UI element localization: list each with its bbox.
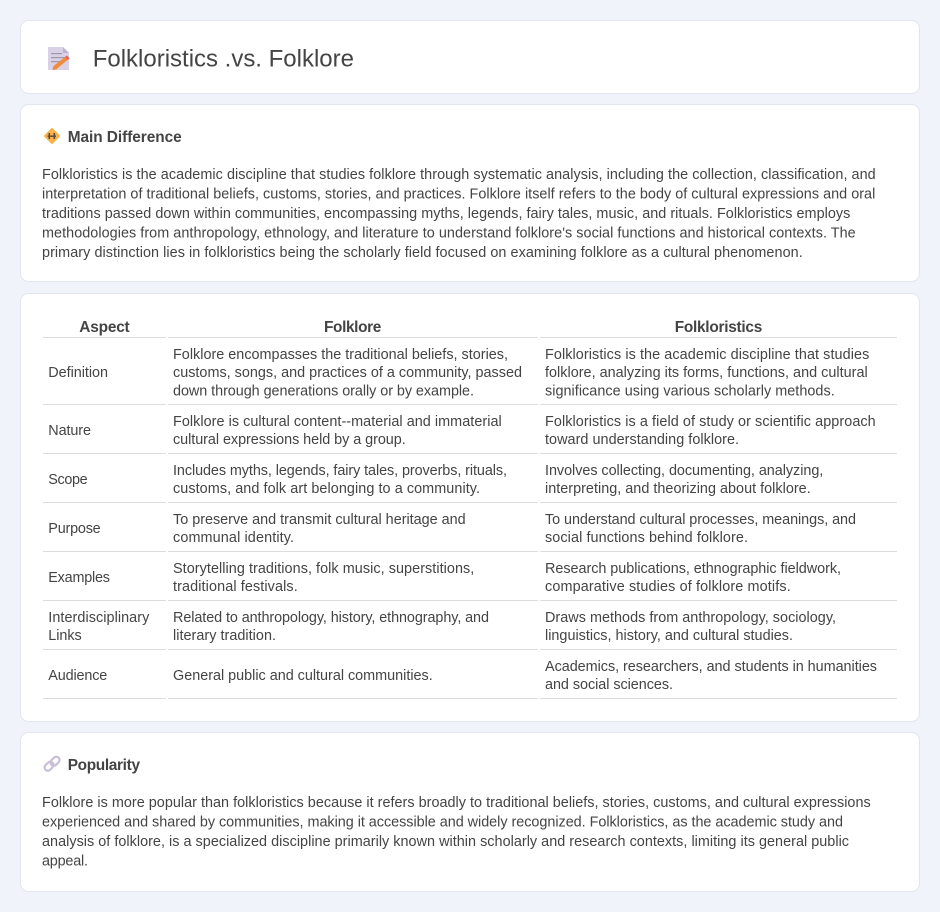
table header row: Folkloristics <box>675 319 762 336</box>
row: examples: comparative studies of folklore motifs. <box>545 579 791 595</box>
text block: popularity paragraph: experienced and shared by communities, making it accessible and widely recognized. Folkloristics, as the academic study and <box>42 814 843 830</box>
row: interdisciplinary links: Draws methods from anthropology, sociology, <box>545 610 836 626</box>
text block: main difference paragraph <box>42 167 876 261</box>
row: audience: Audience <box>48 668 107 684</box>
table header row: Aspect <box>79 319 130 336</box>
row: purpose: social functions behind folklore. <box>545 530 748 546</box>
icon: chain link <box>43 755 61 772</box>
row: scope: interpreting, and theorizing about folklore. <box>545 481 811 497</box>
text block: main difference paragraph: traditions passed down within communities, encompassing myths, legends, fairy tales, music, and rituals. Folkloristics employs <box>42 206 850 222</box>
row: audience: General public and cultural communities. <box>173 668 433 684</box>
row: definition: Definition <box>48 365 108 381</box>
row: examples: Storytelling traditions, folk music, superstitions, <box>173 561 474 577</box>
row: purpose: communal identity. <box>173 530 294 546</box>
row: definition: down through generations orally or by example. <box>173 384 474 400</box>
row: nature: toward understanding folklore. <box>545 432 739 448</box>
row: nature: Nature <box>48 423 91 439</box>
row: audience <box>48 659 877 693</box>
row: scope: Includes myths, legends, fairy tales, proverbs, rituals, <box>173 463 507 479</box>
row: interdisciplinary links: Interdisciplinary <box>48 610 150 626</box>
row: definition: Folkloristics is the academic discipline that studies <box>545 347 869 363</box>
row: examples: traditional festivals. <box>173 579 298 595</box>
icon: warning diamond <box>44 128 60 144</box>
row: purpose: To understand cultural processes, meanings, and <box>545 512 856 528</box>
row: nature <box>48 414 876 448</box>
panel: comparison table <box>20 294 920 722</box>
title: Folkloristics .vs. Folklore <box>93 46 354 73</box>
text block: popularity paragraph <box>42 795 871 870</box>
table header row <box>79 319 762 336</box>
row: examples <box>48 561 841 595</box>
table header row: Folklore <box>324 319 382 336</box>
row: purpose <box>48 512 856 546</box>
text block: popularity paragraph: analysis of folklore, is a specialized discipline primarily known within scholarly and research contexts, limiting its general public <box>42 834 849 850</box>
panel: popularity <box>20 732 920 892</box>
row: audience: and social sciences. <box>545 677 673 693</box>
panel: main difference <box>20 104 920 282</box>
row: examples: Examples <box>48 570 110 586</box>
row: definition: customs, songs, and practices of a community, passed <box>173 365 522 381</box>
row: interdisciplinary links: Related to anthropology, history, ethnography, and <box>173 610 489 626</box>
heading: main difference: Main Difference <box>68 129 182 146</box>
panel: header <box>20 20 920 94</box>
row: definition <box>48 347 869 400</box>
icon: document with pencil <box>48 47 70 70</box>
text block: main difference paragraph: interpretation of traditional beliefs, customs, stories, and practices. Folklore itself refers to the body of cultural expressions and oral <box>42 186 875 202</box>
row: nature: Folkloristics is a field of study or scientific approach <box>545 414 876 430</box>
row: scope: customs, and folk art belonging to a community. <box>173 481 480 497</box>
text block: main difference paragraph: primary distinction lies in folkloristics being the scholarly field focused on examining folklore as a cultural phenomenon. <box>42 245 803 261</box>
text block: popularity paragraph: appeal. <box>42 854 88 870</box>
row: audience: Academics, researchers, and students in humanities <box>545 659 877 675</box>
heading: popularity: Popularity <box>68 757 140 774</box>
row: definition: significance using various scholarly methods. <box>545 384 835 400</box>
row: definition: folklore, analyzing its forms, functions, and cultural <box>545 365 868 381</box>
row: scope <box>48 463 823 497</box>
row: interdisciplinary links: literary tradition. <box>173 628 276 644</box>
row: definition: Folklore encompasses the traditional beliefs, stories, <box>173 347 508 363</box>
row: interdisciplinary links: Links <box>48 628 82 644</box>
row: nature: Folklore is cultural content--material and immaterial <box>173 414 502 430</box>
text block: main difference paragraph: methodologies from anthropology, ethnology, and literature to understand folklore's social functions and historical contexts. The <box>42 226 856 242</box>
text block: popularity paragraph: Folklore is more popular than folkloristics because it refers broadly to traditional beliefs, stories, customs, and cultural expressions <box>42 795 871 811</box>
row: purpose: To preserve and transmit cultural heritage and <box>173 512 466 528</box>
row: interdisciplinary links <box>48 610 836 644</box>
text block: main difference paragraph: Folkloristics is the academic discipline that studies folklore through systematic analysis, including the collection, classification, and <box>42 167 876 183</box>
row: scope: Scope <box>48 472 88 488</box>
row: nature: cultural expressions held by a group. <box>173 432 406 448</box>
row: purpose: Purpose <box>48 521 101 537</box>
row: interdisciplinary links: linguistics, history, and cultural studies. <box>545 628 793 644</box>
row: scope: Involves collecting, documenting, analyzing, <box>545 463 823 479</box>
row: examples: Research publications, ethnographic fieldwork, <box>545 561 841 577</box>
